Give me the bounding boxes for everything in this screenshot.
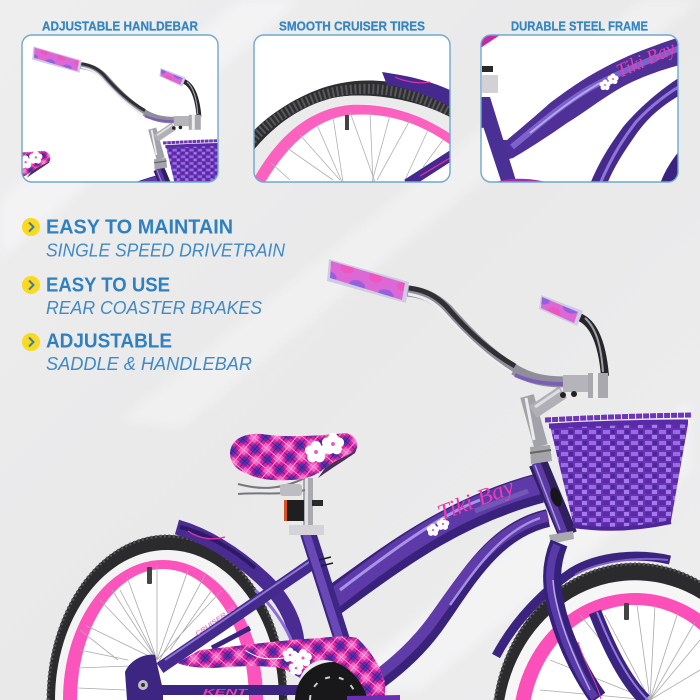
main bicycle [47, 259, 700, 700]
subheading: SADDLE & HANDLEBAR [46, 353, 252, 374]
icon: yellow chevron bullet [22, 276, 40, 294]
subheading: REAR COASTER BRAKES [46, 297, 263, 318]
icon: yellow chevron bullet [22, 218, 40, 236]
icon: yellow chevron bullet [22, 333, 40, 351]
lower tube [590, 77, 680, 184]
panel: durable steel frame [480, 20, 680, 184]
flowers [599, 79, 611, 90]
panel: smooth cruiser tires [250, 20, 452, 184]
tire tread [254, 80, 450, 149]
feature: easy to maintain [22, 216, 286, 260]
text: Tiki Bay decal: Tiki Bay [613, 37, 679, 83]
feature: easy to use [22, 274, 263, 318]
subheading: SINGLE SPEED DRIVETRAIN [46, 240, 286, 260]
right tube piece [661, 153, 678, 182]
whitewall [250, 95, 450, 182]
panel title: SMOOTH CRUISER TIRES [279, 20, 425, 34]
feature: adjustable [22, 330, 252, 374]
seat stay [407, 155, 452, 184]
seat clamp [482, 66, 493, 72]
spokes [271, 112, 443, 182]
heading: ADJUSTABLE [46, 330, 172, 352]
panel title: ADJUSTABLE HANLDEBAR [42, 20, 198, 34]
text: KENT decal: KENT [203, 688, 249, 697]
fender [382, 72, 452, 108]
heading: EASY TO MAINTAIN [46, 216, 233, 238]
panel title: DURABLE STEEL FRAME [511, 20, 648, 34]
seat tube [481, 97, 517, 184]
panel: adjustable handlebar [21, 21, 219, 183]
top tube [498, 37, 680, 160]
heading: EASY TO USE [46, 274, 170, 296]
chainguard edge [498, 178, 544, 182]
text: Cruiser 20 decal: CRUISER 20 [195, 605, 237, 638]
pink rim [252, 105, 452, 184]
saddle corner [482, 36, 500, 47]
text: Tiki Bay decal: Tiki Bay [434, 473, 518, 526]
